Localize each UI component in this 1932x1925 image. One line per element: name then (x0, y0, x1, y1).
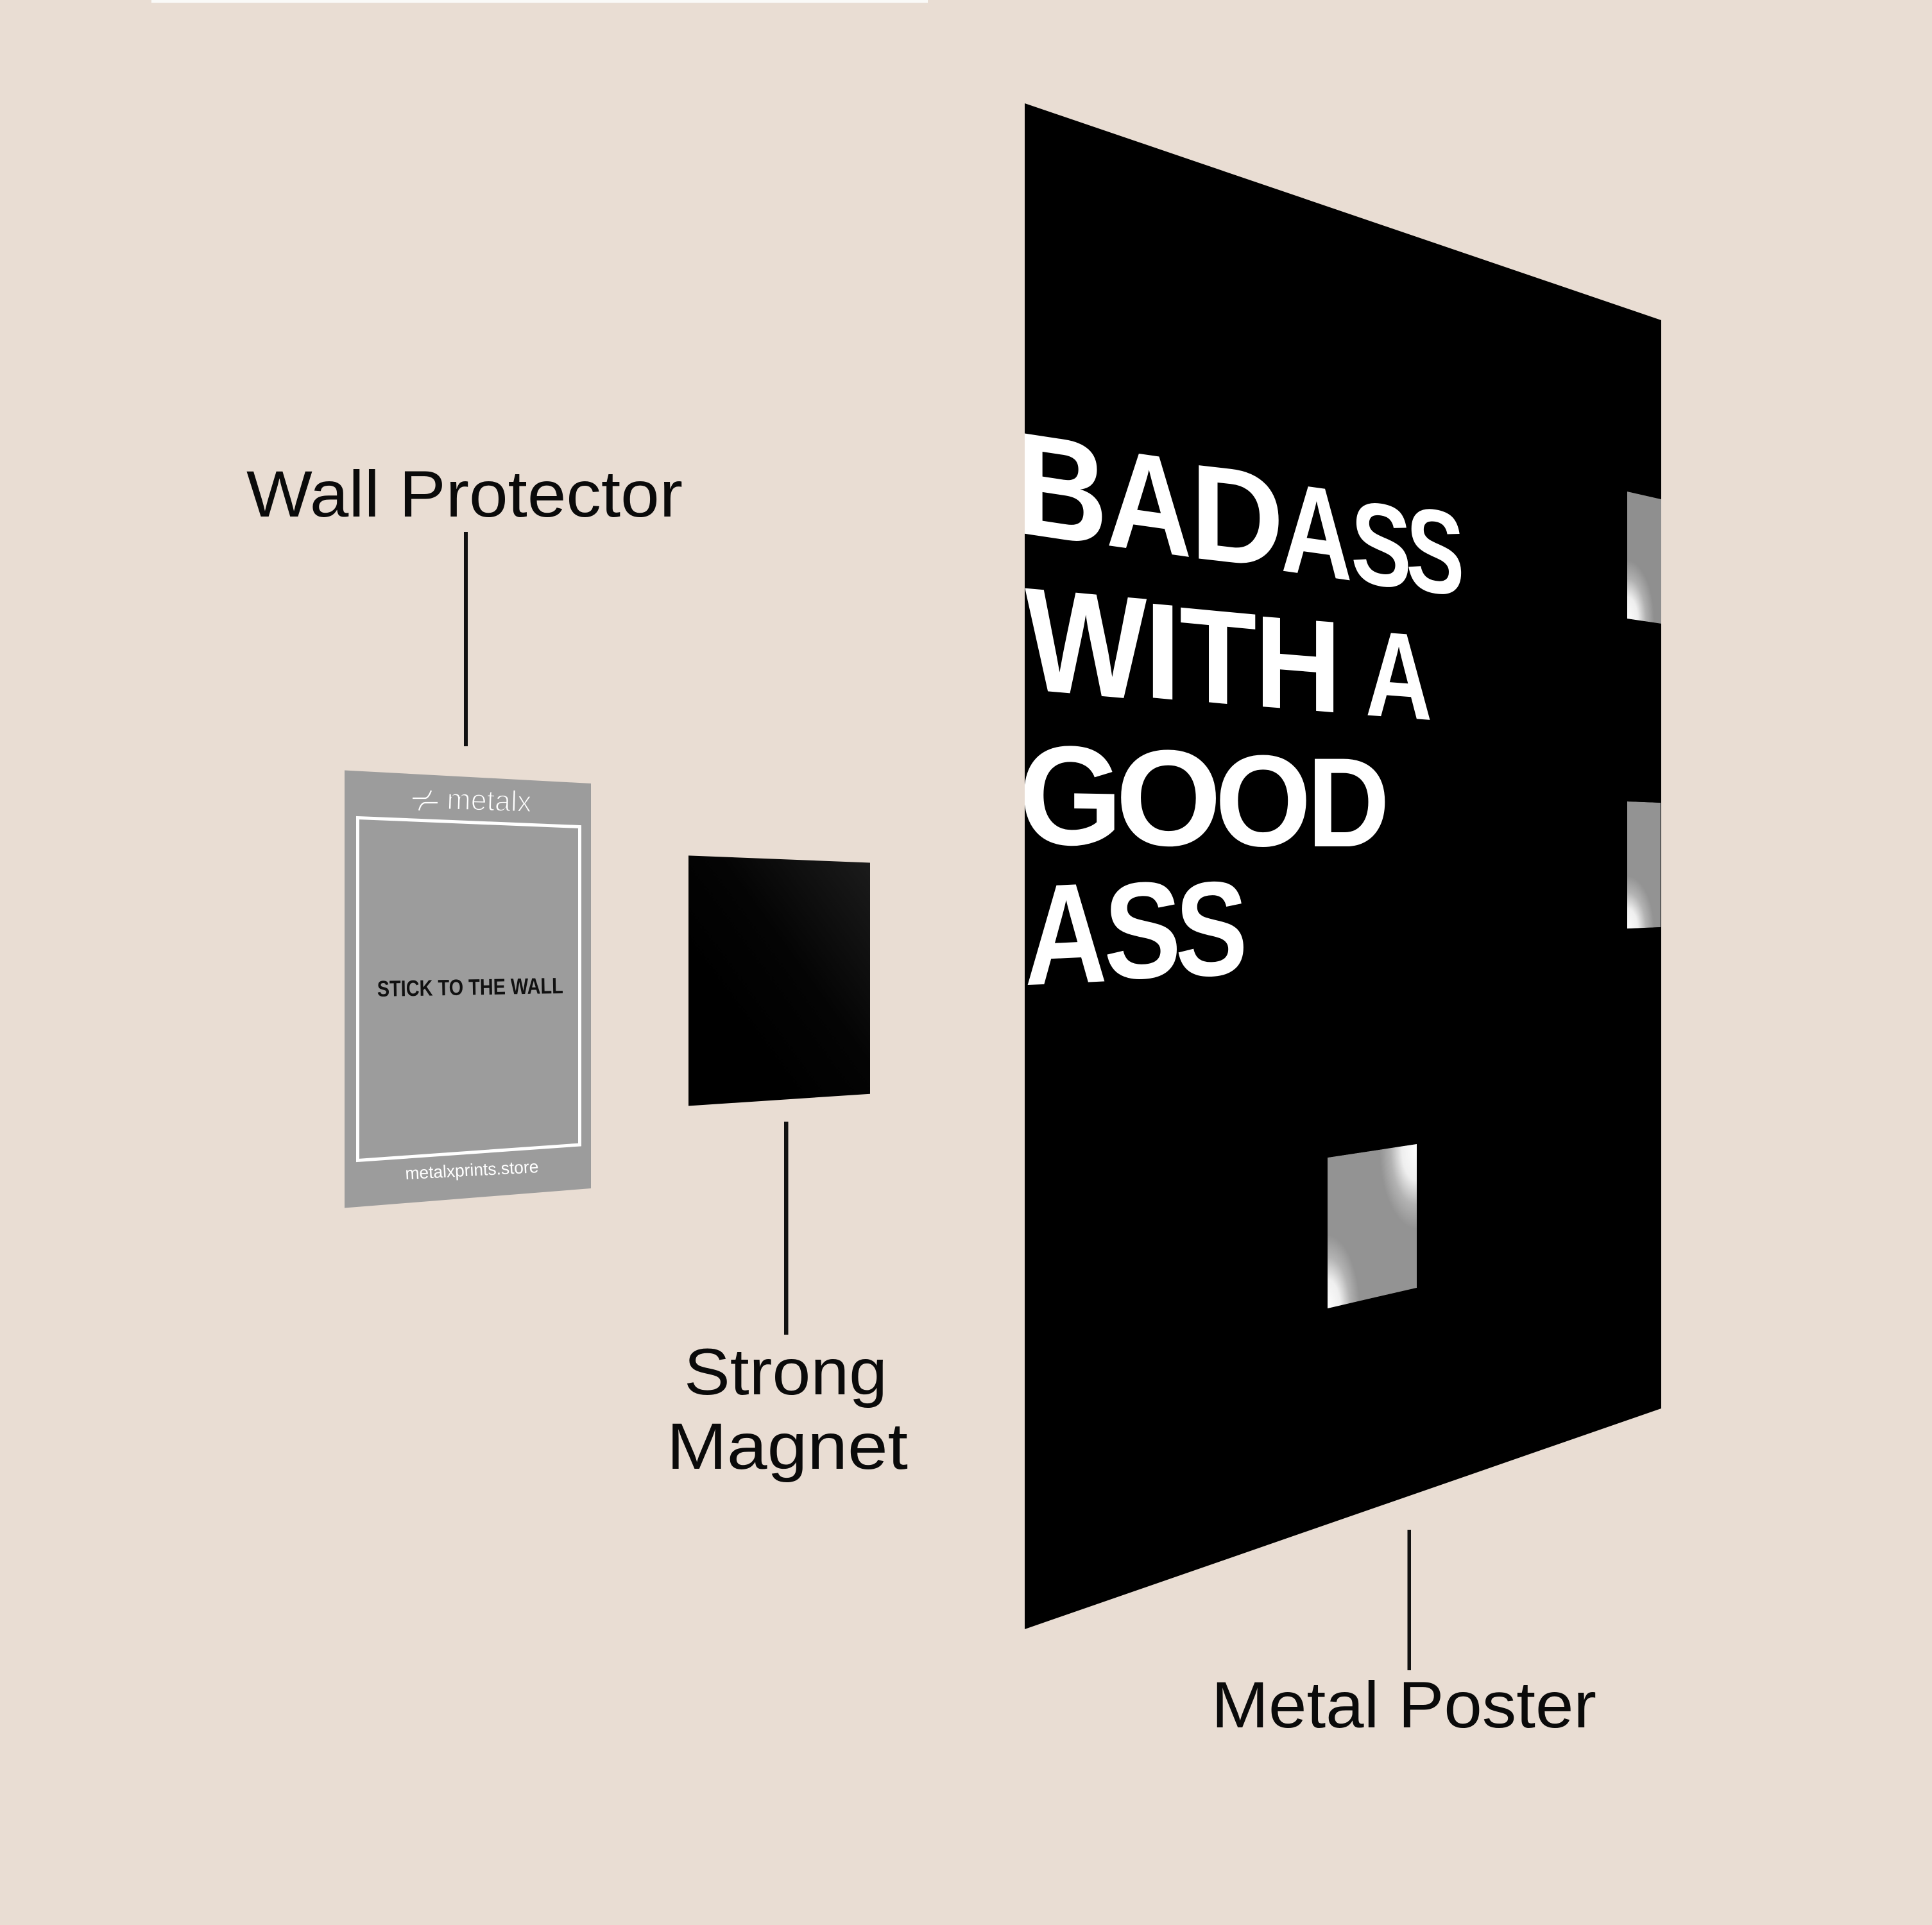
poster headline: D (1307, 731, 1390, 873)
sheet instruction text: STICK TO THE WALL (377, 973, 563, 1002)
leader line: magnet (784, 1122, 788, 1335)
poster headline: S (1175, 853, 1247, 1005)
panel: metal poster (1016, 103, 1661, 1629)
poster headline: A (1025, 851, 1107, 1016)
poster headline: B (1016, 401, 1107, 578)
poster headline: S (1406, 480, 1464, 622)
poster headline: G (1019, 716, 1123, 876)
poster headline: O (1215, 728, 1312, 873)
poster headline: A (1365, 604, 1432, 746)
label: Wall Protector: Wall Protector (246, 458, 683, 531)
poster face (1025, 103, 1661, 1629)
leader line: wall protector (464, 532, 468, 746)
poster headline: W (1025, 556, 1147, 732)
poster headline: S (1104, 852, 1181, 1008)
poster headline: A (1281, 455, 1353, 608)
top white strip (151, 0, 928, 3)
poster headline (1025, 434, 1462, 985)
poster headline: S (1351, 474, 1412, 615)
poster headline: A (1106, 420, 1192, 588)
label: Strong Magnet: Strong (684, 1335, 887, 1408)
mirror patch: right lower (1627, 801, 1661, 928)
poster headline: I (1144, 574, 1181, 730)
poster headline: D (1190, 436, 1284, 597)
leader line: poster (1408, 1530, 1411, 1670)
icon: metalx logo mark (413, 791, 438, 810)
poster headline: O (1115, 721, 1222, 875)
label: Metal Poster: Metal Poster (1211, 1668, 1596, 1741)
label: Strong Magnet (667, 1335, 908, 1483)
poster headline: T (1179, 579, 1256, 735)
sheet background (345, 770, 591, 1208)
panel: strong magnet (688, 855, 870, 1106)
poster headline: H (1254, 587, 1342, 741)
logo wordmark: metalx (447, 782, 532, 818)
sheet url: metalxprints.store (405, 1157, 539, 1183)
panel: wall protector sheet (345, 770, 591, 1208)
label: Strong Magnet: Magnet (667, 1410, 908, 1483)
white frame (358, 817, 580, 1160)
mirror patch: center (1328, 1144, 1417, 1308)
mirror patch: right upper (1627, 492, 1661, 624)
